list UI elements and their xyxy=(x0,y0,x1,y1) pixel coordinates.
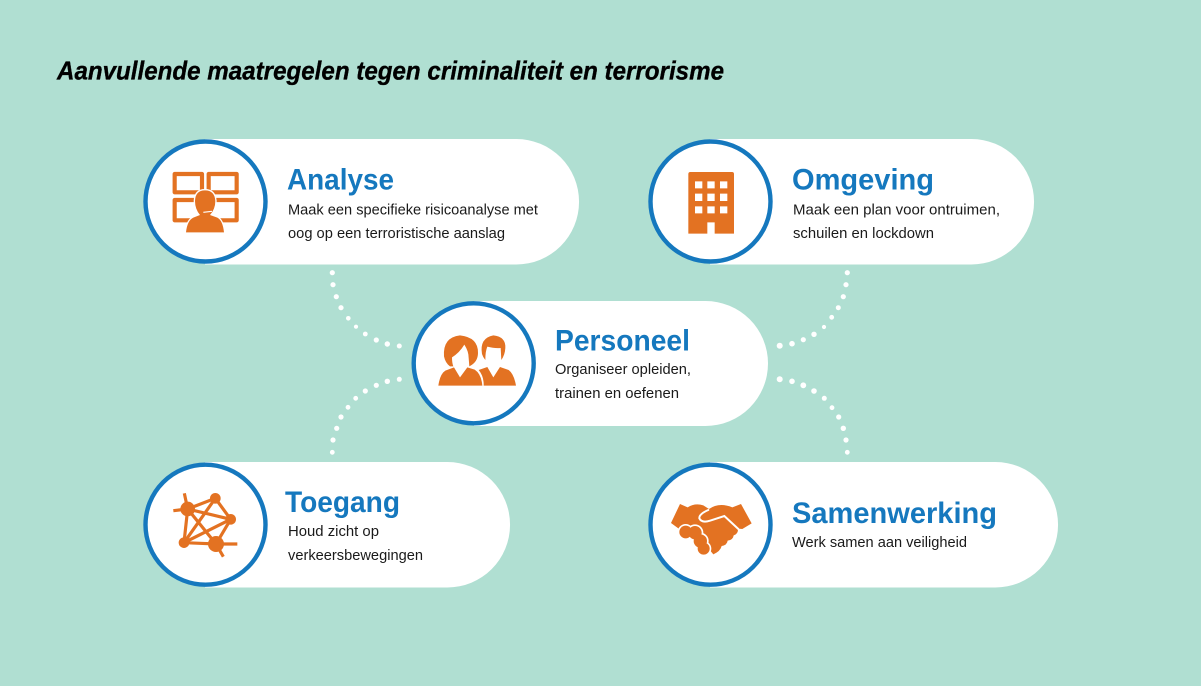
description: schuilen en lockdown xyxy=(793,225,934,242)
panel: Personeel xyxy=(414,301,768,426)
icon: office building xyxy=(688,172,734,234)
dotted connector: Samenwerking to Personeel xyxy=(777,376,850,455)
icon: network xyxy=(173,493,237,557)
panel: Omgeving xyxy=(650,139,1034,264)
description: Houd zicht op xyxy=(288,523,379,540)
title: Aanvullende maatregelen tegen criminaliteit en terrorisme xyxy=(56,56,724,86)
heading: Analyse xyxy=(287,164,394,196)
description: Werk samen aan veiligheid xyxy=(792,534,967,551)
icon circle xyxy=(414,303,534,423)
icon: operator with screens xyxy=(175,174,237,232)
description xyxy=(288,202,539,242)
panel: Toegang xyxy=(146,462,510,588)
dotted connector: Analyse to Personeel xyxy=(330,270,402,348)
panel: Analyse xyxy=(146,139,579,264)
description: oog op een terroristische aanslag xyxy=(288,225,505,242)
pill background xyxy=(710,462,1058,588)
pill background xyxy=(474,301,768,426)
icon: handshake xyxy=(671,504,752,555)
description xyxy=(555,361,691,402)
dotted connector: Omgeving to Personeel xyxy=(777,270,850,349)
heading: Samenwerking xyxy=(792,497,997,530)
icon circle xyxy=(650,465,770,585)
description xyxy=(793,202,1000,242)
description: Maak een plan voor ontruimen, xyxy=(793,202,1000,218)
description: trainen en oefenen xyxy=(555,385,679,402)
panel: Samenwerking xyxy=(650,462,1058,588)
heading: Personeel xyxy=(555,324,690,358)
description: Maak een specifieke risicoanalyse met xyxy=(288,202,539,218)
icon circle xyxy=(650,142,770,262)
heading: Toegang xyxy=(285,486,400,519)
heading: Omgeving xyxy=(792,164,934,196)
icon circle xyxy=(146,142,266,262)
pill background xyxy=(205,139,579,264)
description: Organiseer opleiden, xyxy=(555,361,691,378)
description xyxy=(288,523,423,564)
pill background xyxy=(205,462,510,588)
description: verkeersbewegingen xyxy=(288,547,423,564)
dotted connector: Toegang to Personeel xyxy=(330,377,402,455)
icon: two people xyxy=(438,335,516,386)
pill background xyxy=(710,139,1034,264)
icon circle xyxy=(146,465,266,585)
